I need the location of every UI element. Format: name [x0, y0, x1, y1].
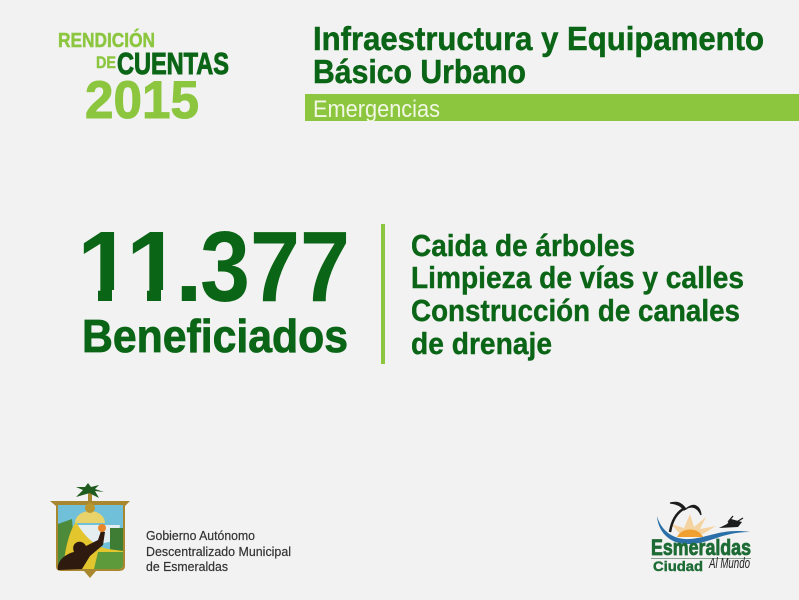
institution name: Descentralizado Municipal — [146, 544, 291, 559]
key figure: beneficiaries: 377 — [200, 211, 350, 323]
list of emergency activities: Limpieza de vías y calles — [411, 260, 744, 295]
section banner: Emergencias: Emergencias — [313, 96, 440, 123]
vertical divider — [381, 224, 385, 364]
title — [313, 20, 764, 90]
list of emergency activities — [411, 228, 744, 361]
logo: Esmeraldas Ciudad Al Mundo — [651, 502, 751, 574]
title: Infraestructura y Equipamento — [313, 20, 764, 57]
institution name: Gobierno Autónomo — [146, 528, 255, 543]
key figure: beneficiaries: 1 — [77, 211, 133, 323]
title: Básico Urbano — [313, 53, 526, 90]
list of emergency activities: Caida de árboles — [411, 228, 635, 263]
logo: Rendición de Cuentas 2015: CUENTAS — [117, 46, 229, 81]
section banner: Emergencias — [305, 94, 799, 123]
list of emergency activities: de drenaje — [411, 326, 552, 361]
icon: municipal coat of arms — [50, 483, 130, 578]
logo: Rendición de Cuentas 2015: RENDICIÓN — [58, 28, 155, 52]
key figure: beneficiaries: Beneficiados — [82, 310, 348, 362]
logo: Esmeraldas Ciudad Al Mundo: Ciudad — [653, 558, 703, 574]
logo: Rendición de Cuentas 2015: 2015 — [85, 71, 199, 130]
list of emergency activities: Construcción de canales — [411, 293, 740, 328]
institution name: de Esmeraldas — [146, 559, 228, 574]
institution name — [146, 528, 291, 574]
logo: Rendición de Cuentas 2015 — [58, 28, 229, 130]
key figure: beneficiaries — [77, 211, 350, 362]
key figure: beneficiaries: 1 — [126, 211, 182, 323]
logo: Rendición de Cuentas 2015: DE — [96, 53, 116, 72]
logo: Esmeraldas Ciudad Al Mundo: Esmeraldas — [651, 535, 751, 560]
key figure: beneficiaries: . — [175, 211, 203, 323]
logo: Esmeraldas Ciudad Al Mundo: Al Mundo — [708, 555, 750, 572]
